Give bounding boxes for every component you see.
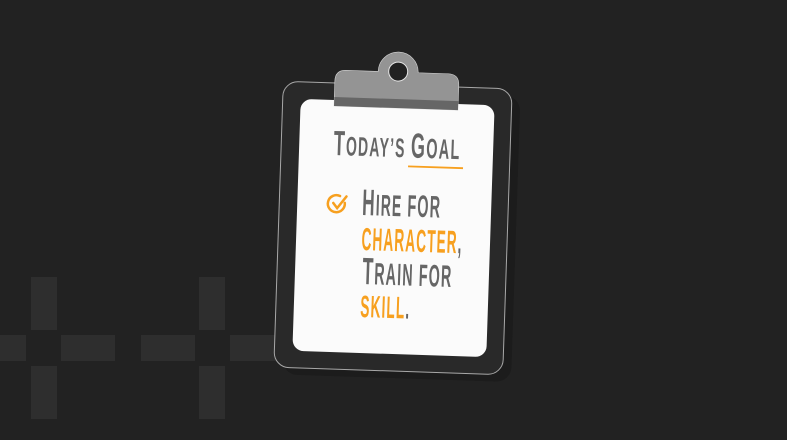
clip body <box>334 50 460 110</box>
line: Train for: TRAIN FOR <box>362 251 453 296</box>
heading underline <box>408 165 463 169</box>
line: Hire for: HIRE FOR <box>362 182 442 226</box>
clipboard: CHARACTER, <box>361 221 463 260</box>
background plus pattern <box>0 277 280 419</box>
clip lower band <box>334 97 458 110</box>
goal text: SKILL. <box>360 289 411 326</box>
icon: check circle <box>328 195 347 213</box>
clipboard board <box>274 81 512 375</box>
clipboard <box>274 48 522 382</box>
heading: Today's Goal: TODAY’S GOAL <box>333 124 461 167</box>
clipboard shadow <box>282 89 520 382</box>
clip hole <box>388 62 408 81</box>
goal text <box>358 182 464 327</box>
paper sheet <box>292 99 495 357</box>
clip <box>334 50 460 110</box>
